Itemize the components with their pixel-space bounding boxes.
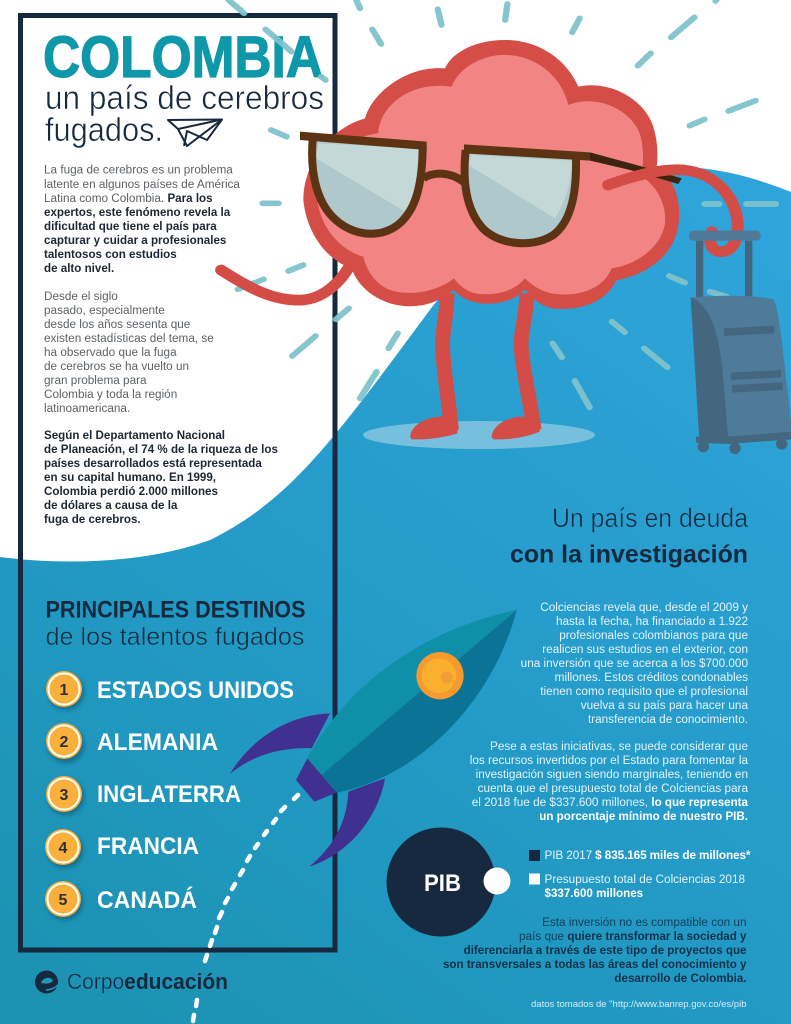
text block: conclusion: son transversales a todas las áreas del conocimiento y	[443, 958, 747, 971]
item 2: ALEMANIA	[97, 729, 218, 756]
text block: conclusion: diferenciarla a través de este tipo de proyectos que	[464, 944, 747, 957]
dotted rocket trail	[193, 795, 298, 1021]
text block: iniciativas: Pese a estas iniciativas, se puede considerar que	[490, 740, 748, 753]
text block: history: desde los años sesenta que	[44, 318, 191, 331]
text block: intro: Latina como Colombia. Para los	[44, 192, 213, 205]
text block: iniciativas: el 2018 fue de $337.600 millones, lo que representa	[472, 796, 749, 809]
text block: Colciencias	[521, 601, 748, 726]
text block: history: ha observado que la fuga	[44, 346, 177, 359]
text block: Colciencias: hasta la fecha, ha financiado a 1.922	[556, 615, 748, 628]
text block: iniciativas: los recursos invertidos por el Estado para fomentar la	[470, 754, 748, 767]
text block: intro	[44, 164, 240, 275]
brain character	[221, 40, 738, 449]
title: un país de cerebros	[45, 79, 324, 116]
text block: human capital: fuga de cerebros.	[44, 513, 141, 526]
heading: destinos	[46, 596, 306, 651]
text block: intro: latente en algunos países de América	[44, 178, 240, 191]
text block: history: Desde el siglo	[44, 290, 118, 303]
legend: $337.600 millones	[544, 887, 643, 900]
legend: PIB 2017 $ 835.165 miles de millones*	[544, 848, 751, 862]
item 4	[45, 829, 199, 868]
item 1: 1	[60, 682, 69, 699]
legend: Presupuesto total de Colciencias 2018	[544, 873, 745, 886]
rocket	[230, 610, 517, 867]
right arm	[608, 170, 738, 252]
text block: human capital	[44, 429, 278, 526]
glasses	[300, 132, 682, 243]
item 3: INGLATERRA	[97, 781, 241, 808]
source note: datos tomados de "http://www.banrep.gov.co/es/pib	[531, 999, 746, 1010]
heading: destinos: de los talentos fugados	[46, 623, 304, 651]
destinations list	[45, 671, 294, 920]
item 3	[46, 776, 241, 815]
text block: iniciativas: cuenta que el presupuesto total de Colciencias para	[478, 782, 748, 795]
text block: human capital: de Planeación, el 74 % de la riqueza de los	[44, 443, 278, 456]
title: fugados.	[45, 111, 163, 148]
feet	[410, 417, 540, 439]
text block: iniciativas: un porcentaje mínimo de nuestro PIB.	[539, 810, 748, 823]
text block: intro: La fuga de cerebros es un problema	[44, 164, 233, 176]
text block: conclusion: desarrollo de Colombia.	[614, 972, 746, 985]
item 5: 5	[59, 892, 68, 909]
item 5: CANADÁ	[97, 886, 197, 914]
PIB chart	[386, 828, 510, 936]
heading: deuda	[510, 503, 749, 568]
text block: Colciencias: tienen como requisito que el profesional	[540, 685, 748, 698]
frame around left column	[20, 16, 335, 950]
item 5	[45, 881, 197, 920]
text block: Colciencias: una inversión que se acerca a los $700.000	[521, 657, 748, 670]
item 3: 3	[60, 787, 69, 804]
text block: human capital: en su capital humano. En 1999,	[44, 471, 216, 484]
text block: conclusion: país que quiere transformar la sociedad y	[519, 930, 747, 943]
legend	[529, 848, 751, 900]
legs	[442, 293, 534, 430]
text block: history: Colombia y toda la región	[44, 388, 177, 401]
heading: deuda: Un país en deuda	[552, 503, 749, 533]
title	[43, 25, 324, 148]
item 1	[46, 671, 294, 710]
text block: Colciencias: transferencia de conocimiento.	[588, 713, 748, 726]
brain outline	[303, 40, 679, 309]
text block: iniciativas	[470, 740, 749, 823]
brain fill	[317, 55, 665, 294]
suitcase	[689, 231, 791, 454]
item 1: ESTADOS UNIDOS	[97, 677, 294, 704]
item 4: 4	[59, 840, 68, 857]
text block: human capital: Según el Departamento Nacional	[44, 429, 225, 442]
text block: history: gran problema para	[44, 374, 147, 387]
text block: intro: capturar y cuidar a profesionales	[44, 234, 226, 247]
item 2	[46, 723, 218, 763]
text block: human capital: países desarrollados está representada	[44, 457, 262, 470]
text block: iniciativas: investigación siguen siendo marginales, teniendo en	[476, 768, 748, 781]
text block: Colciencias: vuelva a su país para hacer una	[581, 699, 748, 712]
item 4: FRANCIA	[97, 833, 199, 860]
text block: Colciencias: Colciencias revela que, desde el 2009 y	[540, 601, 748, 614]
left arm	[221, 260, 353, 300]
text block: history: de cerebros se ha vuelto un	[44, 360, 189, 373]
text block: intro: expertos, este fenómeno revela la	[44, 206, 231, 219]
PIB chart: PIB	[424, 870, 461, 897]
text block: history: pasado, especialmente	[44, 304, 165, 317]
decorative rays around brain	[229, 0, 776, 407]
text block: intro: dificultad que tiene el país para	[44, 220, 217, 233]
item 2: 2	[60, 734, 69, 751]
icon: paper plane	[168, 120, 222, 146]
heading: destinos: PRINCIPALES DESTINOS	[46, 596, 306, 624]
text block: intro: talentosos con estudios	[44, 248, 177, 261]
text block: history	[44, 290, 214, 415]
logo: Corpoeducación: Corpoeducación	[67, 969, 228, 994]
text block: conclusion	[443, 916, 747, 985]
text block: Colciencias: millones. Estos créditos condonables	[555, 671, 748, 684]
title: COLOMBIA	[43, 25, 323, 90]
text block: history: existen estadísticas del tema, se	[44, 332, 214, 345]
text block: intro: de alto nivel.	[44, 262, 114, 275]
text block: human capital: de dólares a causa de la	[44, 499, 178, 512]
shadow under brain	[363, 421, 595, 449]
text block: Colciencias: realicen sus estudios en el exterior, con	[542, 643, 748, 656]
text block: history: latinoamericana.	[44, 402, 130, 415]
heading: deuda: con la investigación	[510, 540, 748, 568]
text block: human capital: Colombia perdió 2.000 millones	[44, 485, 218, 498]
text block: Colciencias: profesionales colombianos para que	[559, 629, 748, 642]
text block: conclusion: Esta inversión no es compatible con un	[542, 916, 746, 929]
